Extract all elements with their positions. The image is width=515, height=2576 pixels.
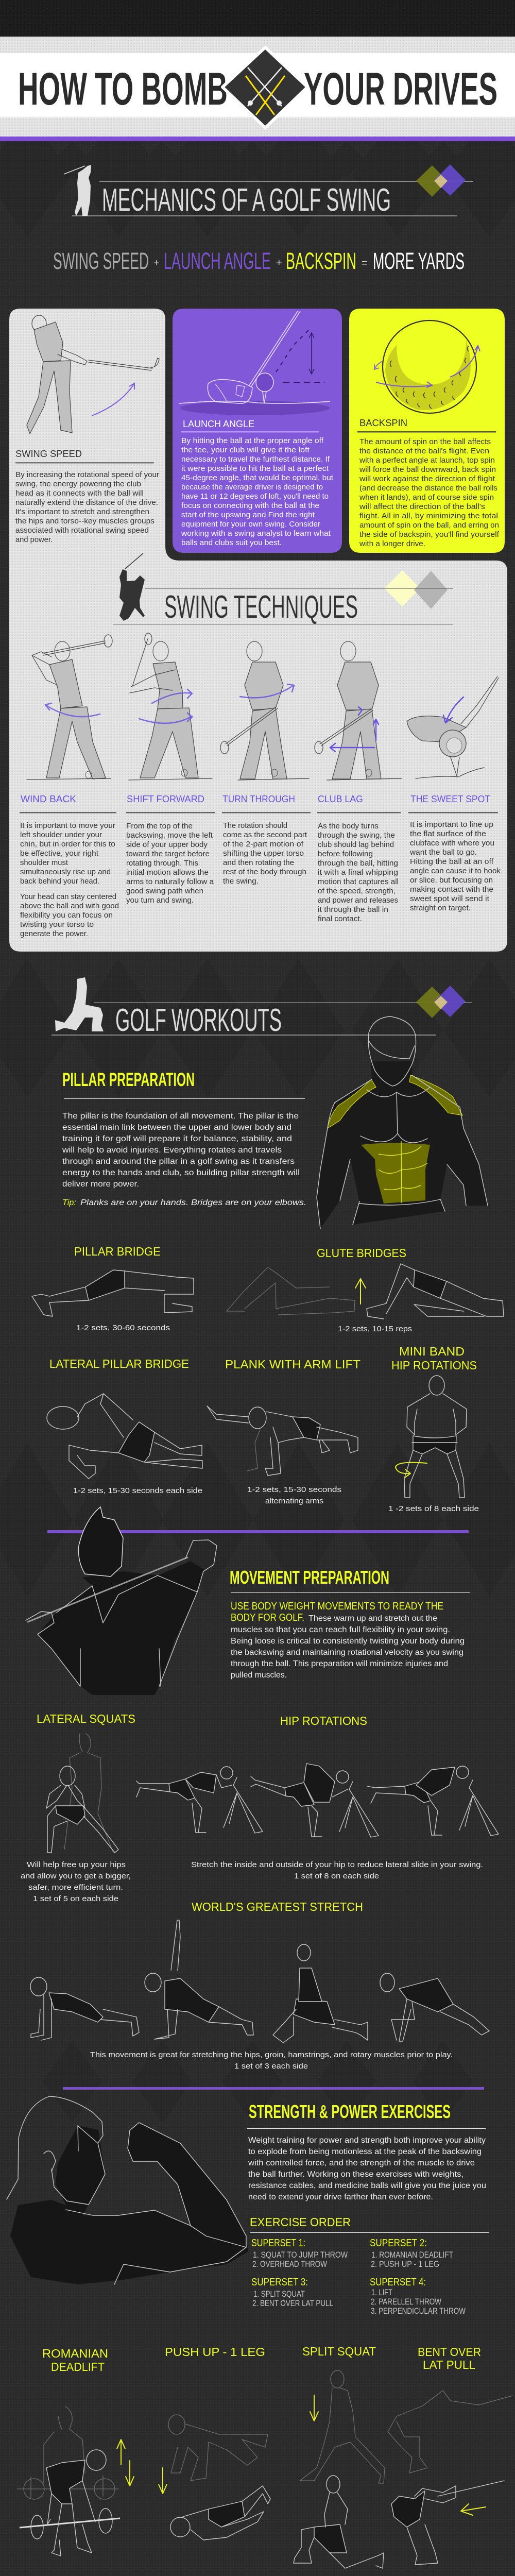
formula: swing speed + launch angle + backspin = more yards: LAUNCH ANGLE xyxy=(164,248,271,274)
section: pillar preparation: training it for golf will prepare it for balance, stability, and xyxy=(62,1134,292,1143)
section: strength and power exercises: to explode from being motionless at the peak of the backswing xyxy=(248,2147,482,2156)
tip: Tip: xyxy=(62,1198,76,1207)
heading: golf workouts: GOLF WORKOUTS xyxy=(115,1003,282,1038)
exercise: push up one leg xyxy=(159,2345,270,2576)
exercise order list: SUPERSET 4: xyxy=(370,2277,426,2288)
panel: backspin: amount of spin on the ball, and erring on xyxy=(359,521,499,530)
formula: swing speed + launch angle + backspin = more yards: + xyxy=(153,258,160,269)
tip: Planks are on your hands. Bridges are on your elbows. xyxy=(80,1198,306,1207)
section: movement preparation: through the ball. This preparation will minimize injuries and xyxy=(231,1659,448,1668)
exercise: world's greatest stretch: 1 set of 3 each side xyxy=(234,2062,308,2071)
panel: backspin xyxy=(349,309,505,553)
technique: the sweet spot: It is important to line up xyxy=(410,821,493,829)
technique: wind back: It is important to move your xyxy=(20,822,115,830)
section: movement preparation: pulled muscles. xyxy=(231,1671,287,1680)
technique: club lag: through the swing, the xyxy=(318,832,395,840)
exercise order list: 2. PUSH UP - 1 LEG xyxy=(371,2259,439,2269)
arrows: up and down xyxy=(117,2439,134,2486)
technique: the sweet spot: want the ball to go. xyxy=(409,849,477,857)
exercise order list: 1. LIFT xyxy=(371,2287,392,2297)
exercise: plank with arm lift: alternating arms xyxy=(265,1497,323,1505)
technique: wind back xyxy=(20,794,119,938)
arrow: down xyxy=(310,2395,318,2421)
figure: stretch one xyxy=(30,1977,139,2040)
panel: swing speed: the hips and torso--key muscles groups xyxy=(15,517,154,526)
section: pillar preparation: essential main link between the upper and lower body and xyxy=(62,1123,291,1132)
exercise: hip rotations: 1 set of 8 on each side xyxy=(294,1872,379,1880)
technique: shift forward: arms to naturally follow a xyxy=(126,878,214,886)
technique: the sweet spot: Hitting the ball at an off xyxy=(410,858,494,866)
panel: launch angle: LAUNCH ANGLE xyxy=(183,419,254,429)
exercise order list: SUPERSET 1: xyxy=(251,2238,305,2249)
technique: wind back: simultaneously rise up and xyxy=(20,868,111,876)
icon: lunge silhouette xyxy=(55,977,104,1031)
panel: launch angle: it were possible to hit the ball at a perfect xyxy=(181,465,329,473)
panel: backspin: BACKSPIN xyxy=(359,418,407,428)
technique: shift forward: SHIFT FORWARD xyxy=(127,794,204,804)
panel: backspin: The amount of spin on the ball affects xyxy=(359,438,491,446)
panel: launch angle xyxy=(173,309,342,553)
technique: club lag: motion that captures all xyxy=(318,878,399,886)
divider: purple rule xyxy=(63,2087,484,2090)
section: strength and power exercises: Weight training for power and strength both improve your ability xyxy=(248,2136,486,2145)
heading: golf workouts xyxy=(52,977,472,1038)
exercise: split squat xyxy=(294,2345,385,2576)
exercise: pillar bridge xyxy=(32,1245,194,1332)
illustration: torso with highlighted pillar muscles xyxy=(317,1016,488,1229)
illustration: golf ball xyxy=(374,320,480,413)
technique: club lag: final contact. xyxy=(318,915,362,923)
technique: turn through: of the 2-part motion of xyxy=(223,840,304,849)
panel: launch angle: balls and clubs suit you best. xyxy=(181,539,282,547)
arrow: left xyxy=(461,2504,486,2515)
exercise: lateral squats: safer, more efficient turn. xyxy=(28,1884,123,1892)
exercise: mini band hip rotations xyxy=(388,1345,479,1513)
technique: wind back: above the ball and with good xyxy=(20,902,119,910)
exercise: bent over lat pull: BENT OVER xyxy=(418,2345,481,2359)
arrows: lag direction xyxy=(330,707,379,752)
panel: swing speed: swing, the energy powering the club xyxy=(15,480,141,488)
panel: light background for swing speed and swing techniques xyxy=(9,309,507,952)
section: strength and power exercises: need to extend your drive farther than ever before. xyxy=(248,2193,433,2201)
exercise: glute bridges: GLUTE BRIDGES xyxy=(317,1246,406,1260)
exercise: romanian deadlift xyxy=(17,2347,134,2576)
exercise: world's greatest stretch xyxy=(30,1900,489,2071)
section: pillar preparation: The pillar is the foundation of all movement. The pillar is the xyxy=(62,1112,299,1121)
exercise: lateral squats: 1 set of 5 on each side xyxy=(33,1895,118,1903)
technique: shift forward: rotating through. This xyxy=(126,859,198,868)
section: strength and power exercises: the ball further. Working on these exercises with weights, xyxy=(248,2170,464,2179)
exercise: hip rotations: Stretch the inside and outside of your hip to reduce lateral slide in your swing. xyxy=(191,1861,483,1869)
exercise: plank with arm lift: 1-2 sets, 15-30 seconds xyxy=(247,1486,341,1494)
exercise order list: 1. ROMANIAN DEADLIFT xyxy=(371,2250,453,2260)
panel: launch angle: have 11 or 12 degrees of loft, you'll need to xyxy=(181,493,329,501)
arrow: rotation xyxy=(396,1463,427,1478)
technique: shift forward xyxy=(126,794,215,905)
technique: wind back: Your head can stay centered xyxy=(20,893,116,901)
technique: club lag: of the speed, strength, xyxy=(318,887,396,895)
arrow: swing direction xyxy=(92,383,134,416)
technique: the sweet spot: clubface with where you xyxy=(410,839,494,848)
technique: wind back: chin, but in order for this to xyxy=(20,840,115,849)
panel: launch angle: working with a swing analyst to learn what xyxy=(181,530,331,538)
section: movement preparation: Being loose is critical to consistently twisting your body during xyxy=(231,1637,465,1646)
illustration: man flexing bicep xyxy=(7,2096,248,2284)
divider: purple rule xyxy=(47,1530,469,1533)
arrow: down xyxy=(159,2468,167,2494)
panel: swing speed: head as it connects with the ball will xyxy=(15,489,144,498)
section: strength and power exercises: resistance cables, and medicine balls will give you the juice you xyxy=(248,2181,486,2190)
illustration: club lag xyxy=(315,641,402,780)
exercise: lateral squats: Will help free up your hips xyxy=(27,1861,126,1869)
section: movement preparation: These warm up and stretch out the xyxy=(308,1614,437,1623)
panel: backspin: flight. All in all, by minimizing the total xyxy=(359,512,498,520)
exercise: hip rotations xyxy=(136,1714,499,1880)
panel: launch angle: 45-degree angle, that would be optimal, but xyxy=(181,474,333,482)
panel: swing speed: By increasing the rotational speed of your xyxy=(15,471,159,479)
technique: wind back: be effective, your right xyxy=(20,850,98,858)
technique: the sweet spot xyxy=(408,794,501,912)
technique: wind back: WIND BACK xyxy=(21,794,76,804)
technique: club lag: As the body turns xyxy=(318,822,379,831)
exercise: mini band hip rotations: MINI BAND xyxy=(399,1345,465,1358)
section: pillar preparation: energy to the hands and club, so building pillar strength will xyxy=(62,1168,300,1177)
technique: wind back: shoulder must xyxy=(20,859,68,867)
panel: backspin: the side of backspin, you'll find yourself xyxy=(359,531,500,539)
technique: shift forward: good swing path when xyxy=(126,887,203,895)
exercise: world's greatest stretch: This movement is great for stretching the hips, groin, hamstrings, and rotary muscles prior to play. xyxy=(90,2051,453,2059)
exercise order list: SUPERSET 3: xyxy=(251,2277,308,2288)
technique: club lag: through the ball, hitting xyxy=(318,859,398,868)
exercise order list: 2. PARELLEL THROW xyxy=(371,2297,441,2307)
exercise: push up one leg: PUSH UP - 1 LEG xyxy=(165,2345,265,2359)
exercise order list: EXERCISE ORDER xyxy=(250,2215,351,2229)
section: movement preparation: BODY FOR GOLF. xyxy=(231,1612,304,1623)
technique: club lag: it with a final whipping xyxy=(318,869,398,877)
figure: hip rotation three xyxy=(367,1766,499,1836)
illustration: man with stick behind shoulders xyxy=(26,1507,217,1695)
icon: overlapping diamonds xyxy=(416,986,466,1018)
panel: launch angle: because the average driver is designed to xyxy=(181,483,323,492)
panel: launch angle: necessary to travel the furthest distance. If xyxy=(181,455,330,464)
technique: club lag: and power and releases xyxy=(318,896,398,905)
illustration: golfer follow through xyxy=(27,315,159,434)
figure: stretch two xyxy=(145,1920,253,2039)
technique: club lag xyxy=(317,794,401,923)
section: pillar preparation: deliver more power. xyxy=(62,1180,139,1189)
exercise: lateral squats: and allow you to get a bigger, xyxy=(21,1872,131,1880)
technique: shift forward: you turn and swing. xyxy=(126,896,194,905)
technique: shift forward: side of your upper body xyxy=(126,841,208,849)
section: movement preparation xyxy=(230,1567,470,1680)
icon: dark golfer silhouette xyxy=(119,553,145,621)
section: movement preparation: USE BODY WEIGHT MOVEMENTS TO READY THE xyxy=(231,1601,443,1612)
icon: overlapping diamonds xyxy=(416,164,466,197)
section: strength and power exercises: with controlled force, and the strength of the muscle to drive xyxy=(248,2159,475,2167)
exercise order list: SUPERSET 2: xyxy=(370,2238,427,2249)
technique: shift forward: backswing, move the left xyxy=(126,832,213,840)
technique: wind back: left shoulder under your xyxy=(20,831,102,839)
technique: shift forward: From the top of the xyxy=(126,822,193,831)
technique: club lag: it through the ball in xyxy=(318,906,388,914)
exercise: bent over lat pull: LAT PULL xyxy=(423,2358,475,2371)
panel: swing speed xyxy=(15,315,159,544)
panel: launch angle: start of the upswing and Find the right xyxy=(181,511,315,519)
formula: swing speed + launch angle + backspin = more yards: BACKSPIN xyxy=(286,248,356,274)
technique: shift forward: initial motion allows the xyxy=(126,869,209,877)
exercise: world's greatest stretch: WORLD'S GREATEST STRETCH xyxy=(192,1900,363,1913)
panel: launch angle: the tee, your club will give it the loft xyxy=(181,446,310,454)
technique: turn through: The rotation should xyxy=(223,822,287,830)
technique: wind back: back behind your head. xyxy=(20,877,99,886)
technique: turn through: come as the second part xyxy=(223,831,307,839)
title: HOW TO BOMB xyxy=(18,63,228,114)
panel: backspin: will work against the direction of flight xyxy=(359,475,495,483)
technique: turn through: and then rotating the xyxy=(223,859,294,867)
technique: turn through: TURN THROUGH xyxy=(222,794,295,804)
exercise: glute bridges xyxy=(227,1246,504,1333)
illustration: turn through xyxy=(220,641,309,780)
technique: club lag: before following xyxy=(318,850,373,858)
technique: turn through: rest of the body through xyxy=(223,868,306,876)
illustration: sweet spot xyxy=(407,676,499,778)
heading: mechanics of a golf swing xyxy=(64,164,473,218)
exercise: bent over lat pull xyxy=(388,2345,512,2576)
panel: launch angle: focus on connecting with the ball at the xyxy=(181,502,319,510)
exercise: lateral pillar bridge: LATERAL PILLAR BRIDGE xyxy=(49,1357,189,1370)
exercise: lateral squats xyxy=(21,1712,135,1903)
technique: the sweet spot: straight on target. xyxy=(410,904,471,912)
panel: backspin: will force the ball downward, back spin xyxy=(359,466,496,474)
technique: shift forward: toward the target before xyxy=(126,850,210,858)
technique: the sweet spot: making contact with the xyxy=(410,886,493,894)
figure: stretch four xyxy=(380,1973,489,2041)
exercise order list: 3. PERPENDICULAR THROW xyxy=(371,2306,466,2316)
technique: wind back: twisting your torso to xyxy=(20,921,94,929)
section: pillar preparation: PILLAR PREPARATION xyxy=(62,1069,195,1090)
panel: swing speed: and power. xyxy=(15,536,53,544)
exercise: mini band hip rotations: HIP ROTATIONS xyxy=(391,1359,477,1372)
panel: swing speed: It's important to stretch and strengthen xyxy=(15,508,149,516)
section: strength and power exercises xyxy=(247,2101,486,2201)
illustration: shift forward xyxy=(129,633,212,780)
formula: swing speed + launch angle + backspin = more yards: SWING SPEED xyxy=(53,248,149,274)
exercise: glute bridges: 1-2 sets, 10-15 reps xyxy=(338,1325,412,1333)
section: pillar preparation xyxy=(62,1069,306,1207)
technique: the sweet spot: or slice, but focusing on xyxy=(410,876,493,885)
arrow: sweet spot target xyxy=(443,697,464,723)
icon: pale diamonds xyxy=(384,570,448,609)
technique: wind back: generate the power. xyxy=(20,930,88,938)
technique: the sweet spot: sweet spot will send it xyxy=(410,895,489,903)
section: pillar preparation: will help to avoid injuries. Everything rotates and travels xyxy=(62,1146,282,1155)
exercise: romanian deadlift: DEADLIFT xyxy=(51,2360,105,2374)
panel: backspin: with a perfect angle at launch, top spin xyxy=(359,456,495,465)
technique: turn through xyxy=(222,794,311,886)
panel: swing speed: naturally extend the distance of the drive. xyxy=(15,499,158,507)
technique: club lag: CLUB LAG xyxy=(318,794,363,804)
section: movement preparation: muscles so that you can reach full flexibility in your swing. xyxy=(231,1625,450,1634)
technique: wind back: flexibility you can focus on xyxy=(20,911,113,920)
exercise: plank with arm lift xyxy=(207,1358,360,1505)
exercise: pillar bridge: 1-2 sets, 30-60 seconds xyxy=(76,1324,170,1332)
exercise: lateral pillar bridge: 1-2 sets, 15-30 seconds each side xyxy=(73,1487,202,1495)
header band xyxy=(0,0,515,141)
exercise order list: 2. BENT OVER LAT PULL xyxy=(252,2298,333,2308)
technique: the sweet spot: THE SWEET SPOT xyxy=(410,794,490,804)
panel: swing speed: SWING SPEED xyxy=(15,449,82,459)
section: pillar preparation: through and around the pillar in a golf swing as it transfers xyxy=(62,1157,295,1166)
panel: backspin: will affect the direction of the ball's xyxy=(359,503,485,511)
exercise: split squat: SPLIT SQUAT xyxy=(302,2345,376,2358)
exercise order list xyxy=(250,2215,489,2316)
exercise order list: 1. SQUAT TO JUMP THROW xyxy=(253,2250,348,2260)
arrow: up xyxy=(355,1279,366,1304)
technique: turn through: the swing. xyxy=(223,877,259,886)
exercise: romanian deadlift: ROMANIAN xyxy=(42,2347,108,2360)
heading: swing techniques: SWING TECHNIQUES xyxy=(164,589,358,625)
figure: hip rotation two xyxy=(251,1764,379,1837)
figure: stretch three xyxy=(273,1944,368,2043)
exercise order list: 1. SPLIT SQUAT xyxy=(253,2289,305,2299)
section: movement preparation: MOVEMENT PREPARATION xyxy=(230,1567,389,1588)
panel: backspin: with a longer drive. xyxy=(359,540,425,548)
heading: swing techniques xyxy=(113,553,453,625)
exercise: mini band hip rotations: 1 -2 sets of 8 each side xyxy=(388,1505,479,1513)
panel: backspin: (and decrease the distance the ball rolls xyxy=(359,484,497,493)
technique: turn through: shifting the upper torso xyxy=(223,850,304,858)
exercise: lateral squats: LATERAL SQUATS xyxy=(37,1712,135,1725)
figure: hip rotation one xyxy=(136,1767,263,1833)
formula: swing speed + launch angle + backspin = more yards: + xyxy=(276,258,282,269)
exercise: pillar bridge: PILLAR BRIDGE xyxy=(74,1245,161,1258)
formula: swing speed + launch angle + backspin = more yards xyxy=(53,248,465,274)
section: movement preparation: the backswing and maintaining rotational velocity as you swing xyxy=(231,1648,464,1657)
panel: swing speed: associated with rotational swing speed xyxy=(15,527,149,535)
exercise: hip rotations: HIP ROTATIONS xyxy=(280,1714,367,1727)
panel: launch angle: equipment for your own swing. Consider xyxy=(181,520,320,529)
illustration: wind back xyxy=(27,635,112,779)
panel: backspin: the distance of the ball's flight. Even xyxy=(359,447,489,455)
exercise: lateral pillar bridge xyxy=(47,1357,202,1495)
exercise order list: 2. OVERHEAD THROW xyxy=(252,2259,327,2269)
icon: crossed golf clubs diamond xyxy=(222,47,307,128)
panel: launch angle: By hitting the ball at the proper angle off xyxy=(181,437,324,445)
technique: club lag: club should lag behind xyxy=(318,841,394,849)
illustration: driver at tee xyxy=(179,311,330,415)
exercise: plank with arm lift: PLANK WITH ARM LIFT xyxy=(225,1358,360,1371)
technique: the sweet spot: the flat surface of the xyxy=(410,830,486,838)
technique: the sweet spot: angle can cause it to hook xyxy=(410,867,501,875)
panel: backspin: when it lands), and of course side spin xyxy=(359,494,494,502)
icon: golfer silhouette xyxy=(64,165,91,216)
formula: swing speed + launch angle + backspin = more yards: = xyxy=(362,258,368,269)
